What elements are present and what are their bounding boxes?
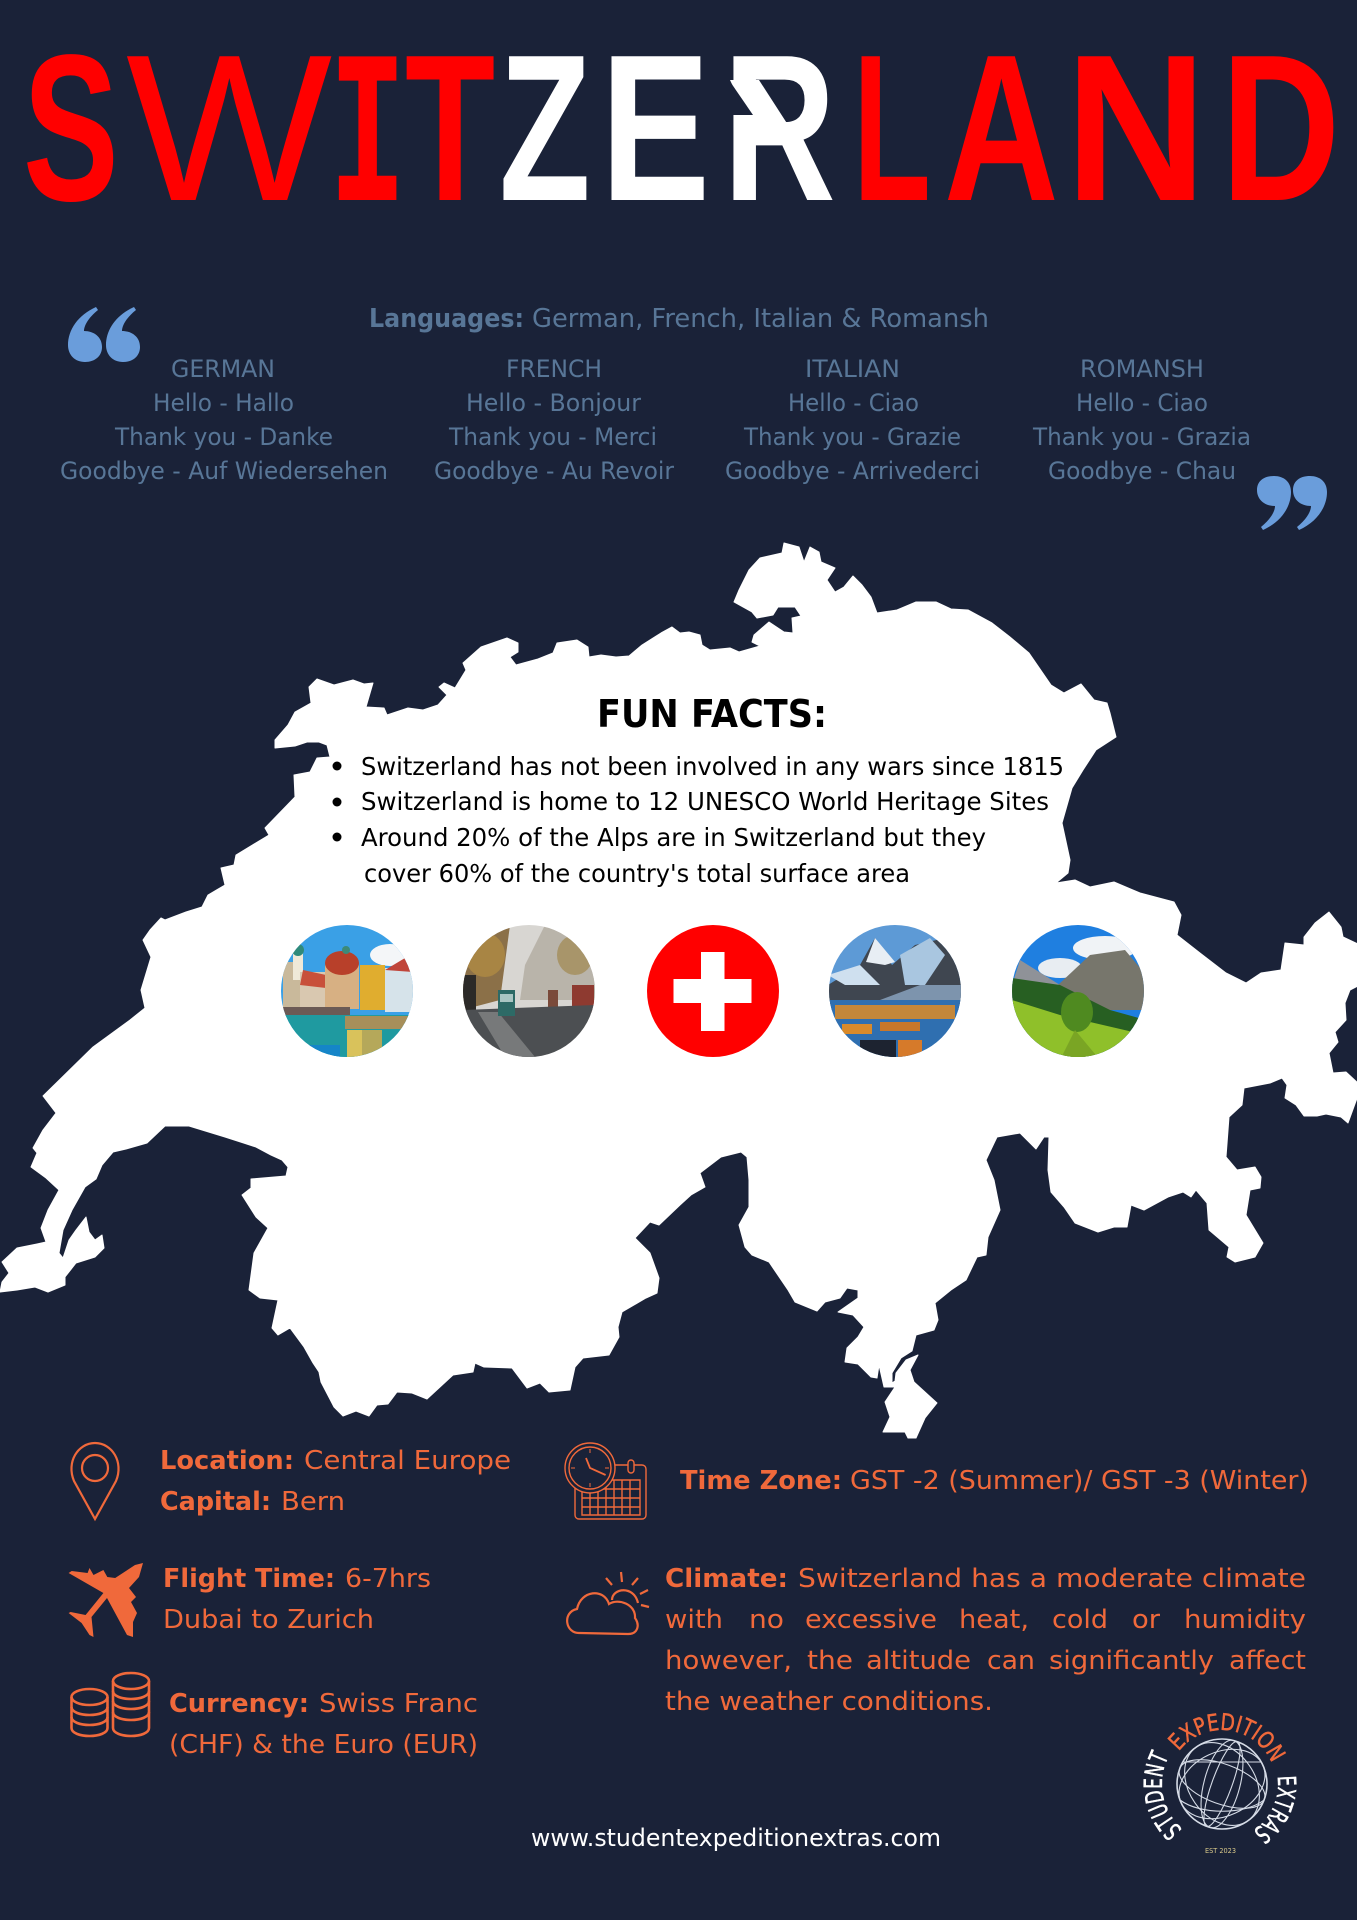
icon: cloud and sun bbox=[567, 1572, 649, 1634]
info: flight time bbox=[69, 1563, 431, 1637]
info: climate: significantly bbox=[1049, 1646, 1214, 1676]
fun facts list: cover 60% of the country's total surface area bbox=[364, 859, 910, 888]
info: climate: Switzerland has a moderate climate bbox=[798, 1564, 1306, 1594]
info: flight time: Dubai to Zurich bbox=[163, 1605, 374, 1635]
info: climate: excessive bbox=[805, 1605, 937, 1635]
icon: Swiss flag bbox=[647, 925, 779, 1057]
title: A bbox=[944, 12, 1059, 245]
column: German: Thank you - Danke bbox=[114, 423, 333, 451]
info: time zone: GST -2 (Summer)/ GST -3 (Winter) bbox=[850, 1466, 1309, 1496]
title: S bbox=[23, 11, 119, 244]
title: E bbox=[600, 11, 710, 244]
title: D bbox=[1221, 11, 1340, 244]
column: Italian bbox=[725, 355, 980, 485]
logo text: STUDENT bbox=[1143, 1748, 1182, 1840]
fun facts heading: FUN FACTS: bbox=[597, 692, 827, 736]
info: time zone bbox=[565, 1443, 1309, 1519]
photo: Bern street bbox=[462, 925, 596, 1057]
info: currency: Currency: bbox=[169, 1689, 309, 1719]
info: climate: Climate: bbox=[665, 1564, 788, 1594]
info: climate: no bbox=[749, 1605, 784, 1635]
icon: coin stacks bbox=[72, 1673, 149, 1736]
fun facts list: Around 20% of the Alps are in Switzerland but they bbox=[361, 823, 986, 852]
column: German: GERMAN bbox=[171, 355, 275, 383]
column: French bbox=[434, 355, 674, 485]
column: Romansh: Hello - Ciao bbox=[1076, 389, 1208, 417]
column: French: Hello - Bonjour bbox=[466, 389, 641, 417]
info: climate: can bbox=[987, 1646, 1035, 1676]
info: climate: the bbox=[807, 1646, 853, 1676]
icon: closing quote bbox=[1257, 476, 1327, 530]
title: N bbox=[1065, 10, 1207, 244]
logo text: EST 2023 bbox=[1205, 1847, 1236, 1855]
info: flight time: 6-7hrs bbox=[345, 1564, 431, 1594]
fun facts list: Switzerland has not been involved in any wars since 1815 bbox=[361, 752, 1064, 781]
icon: location pin bbox=[71, 1443, 119, 1519]
logo text: EXTRAS bbox=[1255, 1776, 1297, 1844]
title: W bbox=[126, 11, 332, 245]
info: location and capital: Capital: bbox=[160, 1487, 271, 1517]
info: climate bbox=[567, 1564, 1306, 1717]
languages heading: German, French, Italian & Romansh bbox=[532, 304, 989, 334]
icon: opening quote bbox=[68, 307, 140, 362]
info: currency: Swiss Franc bbox=[319, 1689, 478, 1719]
info: location and capital: Central Europe bbox=[304, 1446, 511, 1476]
info: climate: or bbox=[1132, 1605, 1160, 1635]
info: currency bbox=[72, 1673, 478, 1760]
photo: Lucerne waterfront bbox=[280, 925, 415, 1060]
info: climate: the weather conditions. bbox=[665, 1687, 993, 1717]
fun facts list: Switzerland is home to 12 UNESCO World Heritage Sites bbox=[361, 787, 1049, 816]
photo: alpine meadow bbox=[1010, 925, 1146, 1060]
info: location and capital bbox=[71, 1443, 511, 1519]
column: Romansh: Thank you - Grazia bbox=[1032, 423, 1251, 451]
title: T bbox=[405, 12, 495, 245]
languages panel bbox=[60, 304, 1251, 485]
fun facts list bbox=[332, 752, 1064, 888]
logo globe bbox=[1168, 1728, 1276, 1840]
column: French: Goodbye - Au Revoir bbox=[434, 457, 674, 485]
column: Italian: Hello - Ciao bbox=[788, 389, 919, 417]
info: climate: altitude bbox=[866, 1646, 971, 1676]
info: climate: humidity bbox=[1184, 1605, 1306, 1635]
column: Italian: Goodbye - Arrivederci bbox=[725, 457, 980, 485]
title: Z bbox=[499, 10, 591, 245]
info: climate: cold bbox=[1052, 1605, 1108, 1635]
website: www.studentexpeditionextras.com bbox=[531, 1824, 941, 1852]
photo: Zermatt bbox=[828, 925, 962, 1060]
column: Romansh bbox=[1032, 355, 1251, 485]
icon: clock and calendar bbox=[565, 1443, 646, 1519]
column: Romansh: Goodbye - Chau bbox=[1048, 457, 1236, 485]
info: time zone: Time Zone: bbox=[680, 1466, 842, 1496]
column: German: Goodbye - Auf Wiedersehen bbox=[60, 457, 388, 485]
info: location and capital: Location: bbox=[160, 1446, 294, 1476]
logo text bbox=[1143, 1712, 1297, 1855]
column: Romansh: ROMANSH bbox=[1080, 355, 1204, 383]
info: climate: with bbox=[665, 1605, 723, 1635]
title: L bbox=[853, 10, 931, 245]
title: R bbox=[723, 12, 836, 245]
fun facts bbox=[332, 692, 1064, 888]
column: Italian: ITALIAN bbox=[805, 355, 900, 383]
column: French: Thank you - Merci bbox=[448, 423, 657, 451]
column: French: FRENCH bbox=[506, 355, 602, 383]
title: I bbox=[329, 19, 406, 266]
column: Italian: Thank you - Grazie bbox=[743, 423, 961, 451]
logo: Student Expedition Extras bbox=[1143, 1712, 1297, 1855]
logo text: EXPEDITION bbox=[1167, 1712, 1286, 1762]
column: German bbox=[60, 355, 388, 485]
languages heading: Languages: bbox=[369, 304, 524, 334]
column: German: Hello - Hallo bbox=[153, 389, 294, 417]
info: climate: affect bbox=[1229, 1646, 1306, 1676]
map of Switzerland bbox=[0, 543, 1357, 1438]
info: flight time: Flight Time: bbox=[163, 1564, 335, 1594]
icon: airplane bbox=[69, 1563, 143, 1637]
info: currency: (CHF) & the Euro (EUR) bbox=[169, 1730, 478, 1760]
info: location and capital: Bern bbox=[281, 1487, 345, 1517]
info: climate: heat, bbox=[959, 1605, 1029, 1635]
title bbox=[23, 10, 1340, 266]
info: climate: however, bbox=[665, 1646, 792, 1676]
